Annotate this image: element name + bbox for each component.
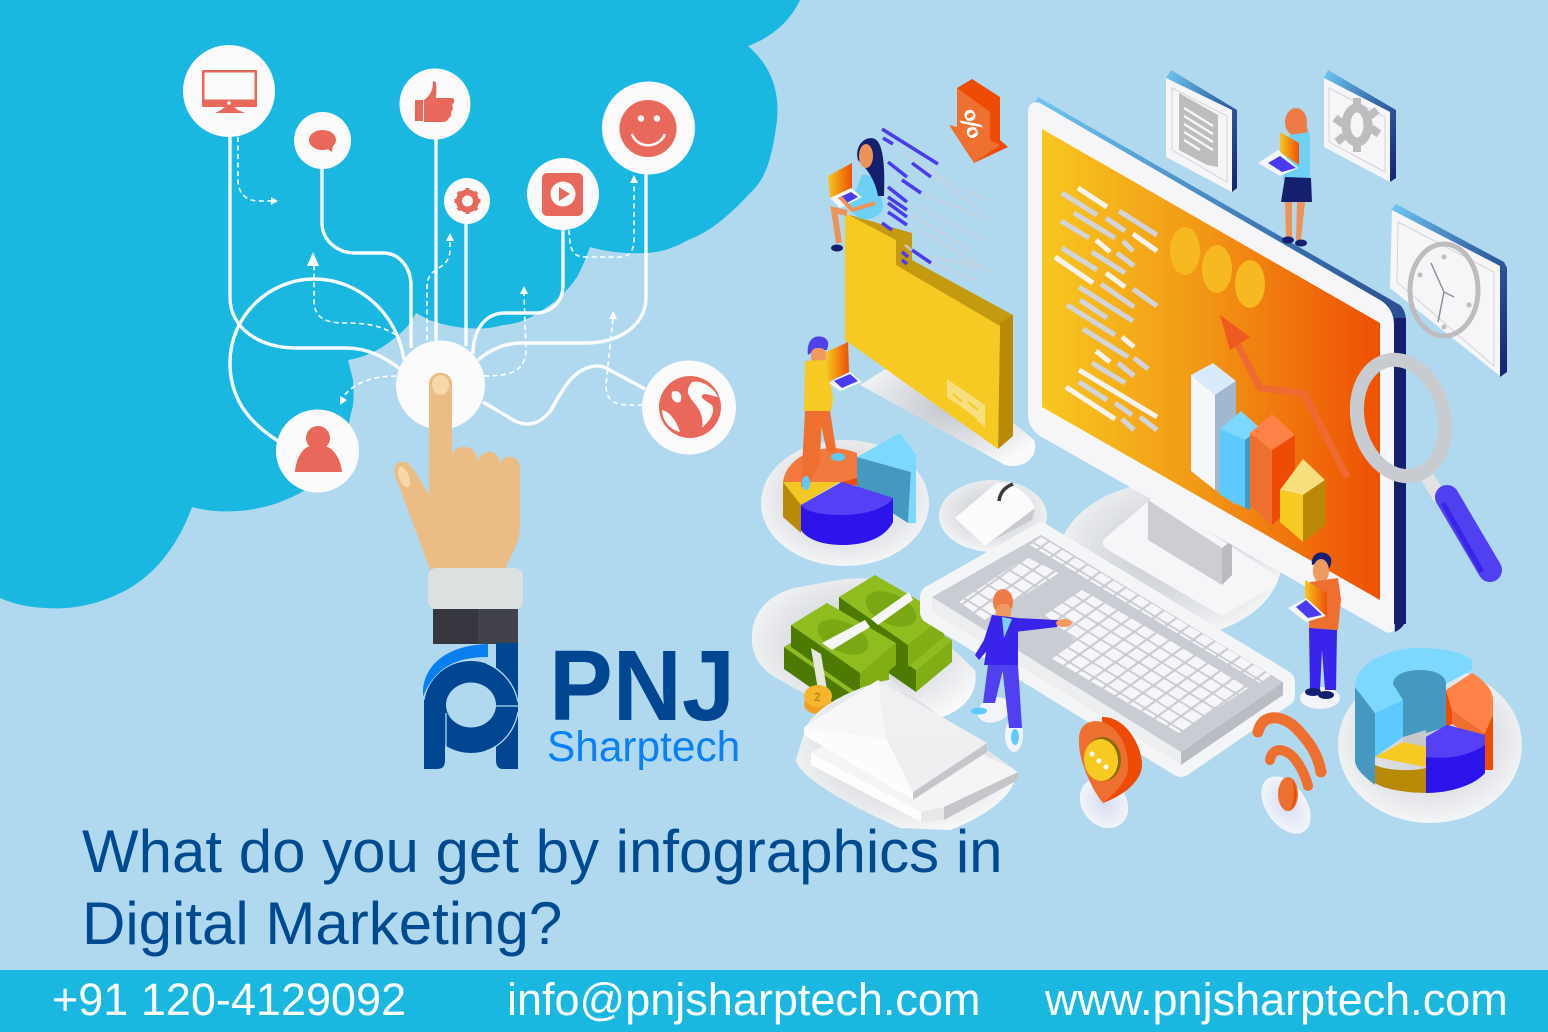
website: www.pnjsharptech.com <box>1044 974 1508 1025</box>
keyboard right side <box>1181 682 1283 765</box>
right dark edge <box>1394 318 1406 624</box>
money bands <box>871 592 913 625</box>
person: man in orange vest <box>1288 552 1341 709</box>
keyboard left side <box>932 597 1181 765</box>
folder shadow <box>860 360 1035 466</box>
dots <box>1170 227 1265 308</box>
dashed arrows <box>238 137 643 405</box>
pie slices <box>783 448 857 486</box>
monitor back edge <box>1030 97 1406 632</box>
illustration: money stack <box>752 575 976 725</box>
panel: gear card <box>1324 70 1396 182</box>
illustration: donut chart <box>1338 648 1522 823</box>
bar chart <box>1191 363 1325 542</box>
icon: smiley <box>602 82 695 174</box>
lens ring <box>1345 350 1457 486</box>
icon: globe <box>642 360 736 454</box>
dark left side <box>1355 687 1375 785</box>
email: info@pnjsharptech.com <box>507 974 980 1025</box>
monitor stand <box>1110 500 1270 608</box>
logo wordmark: PNJ <box>549 630 735 742</box>
shirt cuff <box>428 568 523 609</box>
illustration: keyboard <box>932 535 1283 765</box>
yellow slice <box>1375 742 1426 767</box>
person: woman with laptop on folder <box>828 138 884 252</box>
title <box>82 818 1003 957</box>
icon: gear <box>444 178 490 224</box>
illustration: folder <box>845 213 1035 466</box>
title: Digital Marketing? <box>82 890 562 957</box>
illustration: small pie chart <box>761 433 929 566</box>
hand <box>394 373 520 570</box>
connector lines <box>230 137 646 441</box>
code lines <box>1055 188 1157 430</box>
orange slice <box>1446 673 1493 770</box>
center touch point <box>396 340 485 430</box>
illustration: location pin <box>1070 717 1142 838</box>
coins <box>804 685 832 714</box>
stand shadow <box>1058 482 1282 638</box>
folder lip <box>850 215 1013 330</box>
icon: monitor <box>183 45 275 137</box>
logo subtitle: Sharptech <box>547 723 740 770</box>
icon: video play <box>527 158 599 230</box>
wedge block <box>857 457 911 523</box>
icon: percent arrow <box>949 79 1008 163</box>
thumb nail <box>395 465 413 489</box>
footer bar <box>0 970 1548 1032</box>
upper envelope <box>804 680 987 800</box>
icon: user <box>276 410 359 492</box>
title: What do you get by infographics in <box>82 818 1003 885</box>
illustration: magnifying glass <box>1345 350 1490 572</box>
blue slice <box>1426 725 1485 793</box>
handle <box>1426 475 1440 498</box>
illustration: computer monitor <box>1028 97 1406 638</box>
illustration: wifi signal <box>1251 718 1321 843</box>
trend arrow <box>1220 315 1347 477</box>
folder side <box>998 315 1013 449</box>
inner hole <box>1393 670 1446 740</box>
person: man in yellow shirt <box>801 336 862 490</box>
arrow heads <box>271 175 638 405</box>
illustration: envelopes <box>796 680 1018 830</box>
folder front <box>845 213 1000 449</box>
screen <box>1042 129 1380 600</box>
folder tag <box>947 379 985 427</box>
floating code lines <box>882 129 990 280</box>
monitor bezel <box>1028 102 1394 633</box>
icon: thumbs up <box>400 68 470 140</box>
top ring <box>1355 648 1472 713</box>
network diagram <box>183 45 736 492</box>
illustration: mouse <box>939 480 1047 552</box>
pointing hand <box>394 373 523 644</box>
lower envelope <box>811 745 1018 822</box>
keys <box>959 537 1271 733</box>
panel: document card <box>1166 70 1237 192</box>
keyboard halo <box>932 535 1283 765</box>
front strip <box>1375 700 1403 757</box>
logo mark <box>423 643 518 769</box>
finger nail <box>432 375 449 395</box>
person: man in suit <box>971 589 1072 752</box>
icon: percent arrow: % <box>952 105 990 143</box>
coins: 2 <box>814 690 821 704</box>
logo: PNJ Sharptech <box>423 630 740 770</box>
cloud background shape <box>0 0 800 608</box>
keyboard top <box>932 535 1283 752</box>
panel: clock card <box>1390 204 1507 377</box>
sleeve <box>433 609 518 644</box>
phone: +91 120-4129092 <box>52 974 406 1025</box>
person: woman standing on monitor <box>1258 108 1312 246</box>
icon: chat bubble <box>294 112 351 169</box>
